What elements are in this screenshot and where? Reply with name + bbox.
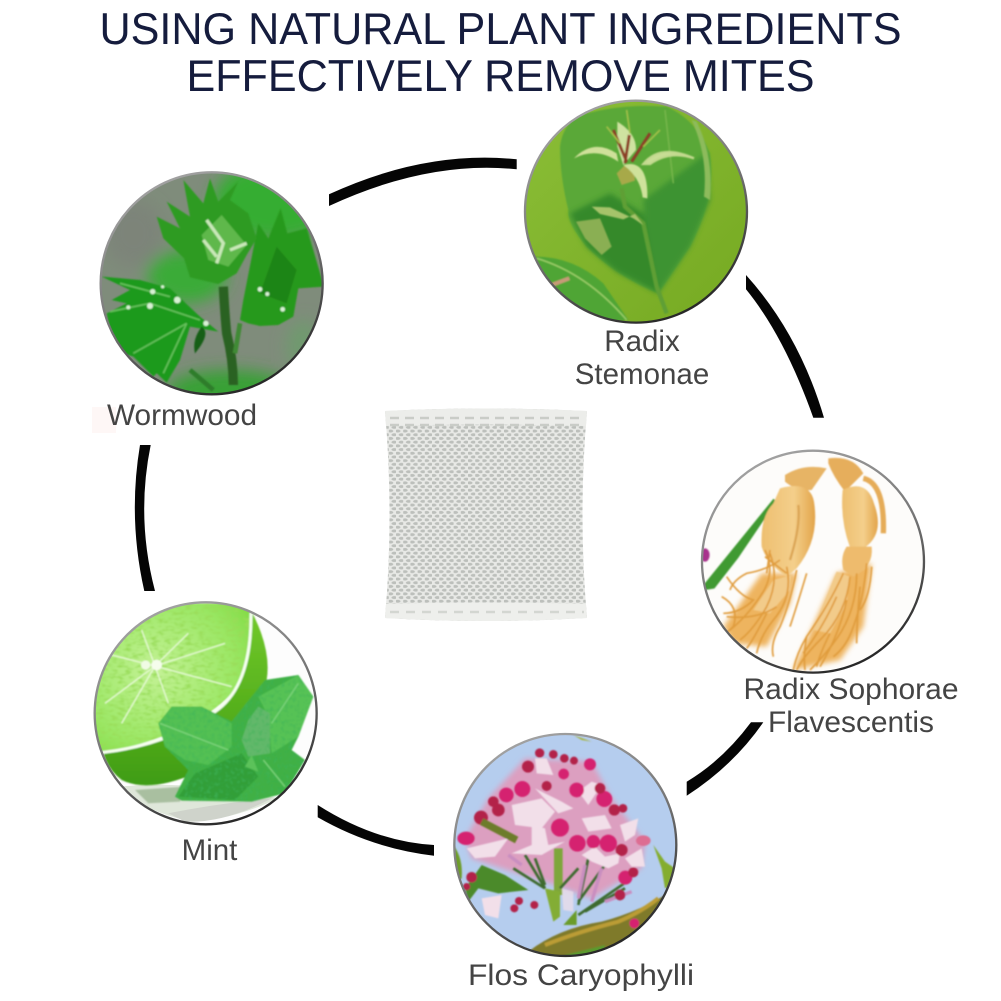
ring connector arcs [135, 158, 824, 856]
icon: radix stemonae photo [524, 100, 748, 324]
icon: flos caryophylli photo [453, 732, 678, 958]
label: Radix Stemonae: Radix [604, 325, 680, 358]
label: Radix Stemonae [575, 325, 709, 391]
icon: mint and lime photo [94, 601, 318, 826]
title [100, 5, 902, 101]
title: EFFECTIVELY REMOVE MITES [186, 52, 814, 101]
label: Wormwood: Wormwood [107, 399, 257, 432]
label: Radix Sophorae Flavescentis: Flavescentis [768, 706, 934, 739]
title: USING NATURAL PLANT INGREDIENTS [100, 5, 902, 54]
label: Radix Sophorae Flavescentis: Radix Sophorae [744, 673, 958, 706]
icon: wormwood photo [100, 171, 324, 396]
icon: radix sophorae root photo [700, 450, 926, 674]
label: Radix Sophorae Flavescentis [744, 673, 958, 739]
center product: mesh sachet [385, 408, 587, 621]
label: Radix Stemonae: Stemonae [575, 358, 709, 391]
label: Flos Caryophylli: Flos Caryophylli [468, 959, 694, 992]
label: Mint: Mint [182, 834, 237, 867]
